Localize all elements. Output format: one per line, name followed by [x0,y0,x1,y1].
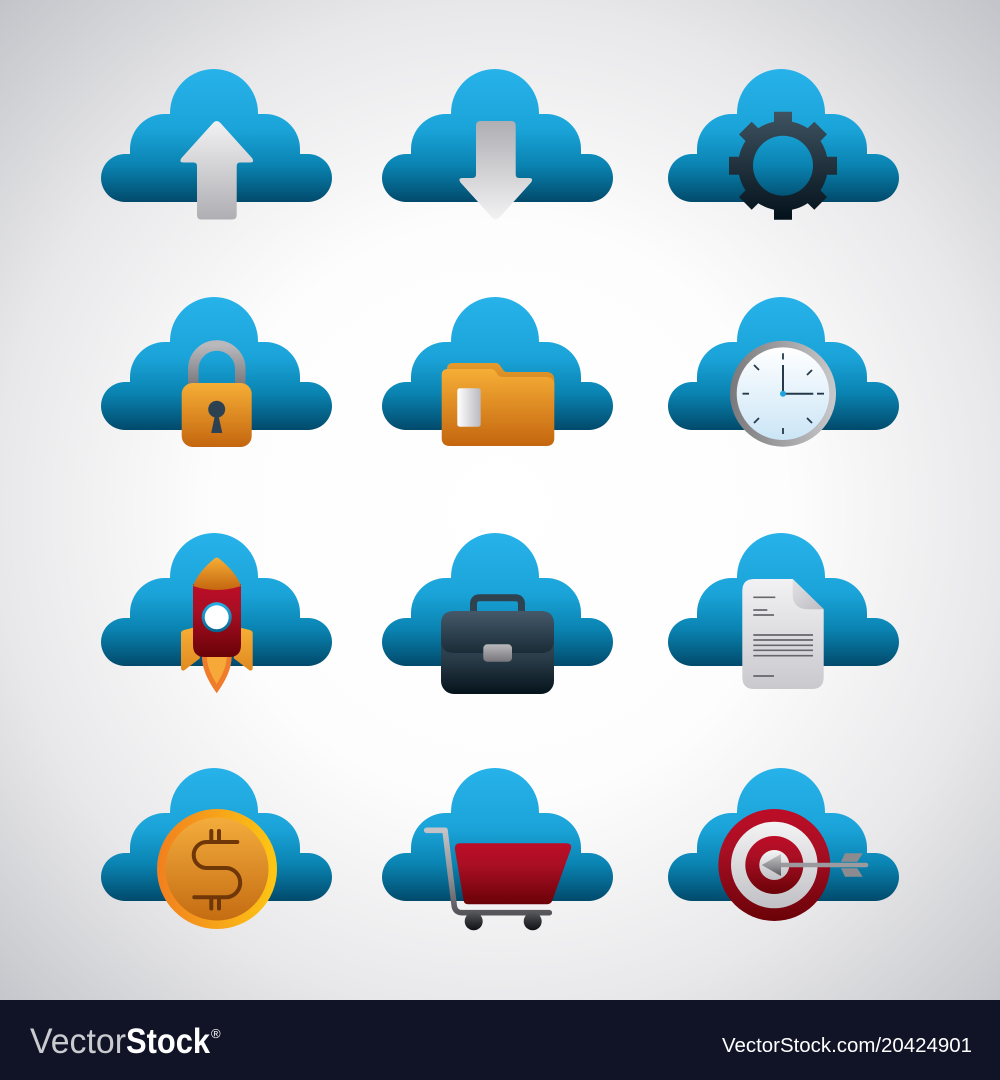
panel: cloud upload [101,69,332,220]
icon: clock [730,341,836,447]
panel: cloud coin [101,768,332,929]
icon: shopping cart [427,830,571,930]
cloud shape [101,69,332,202]
icon: up arrow [180,121,253,220]
panel: cloud download [382,69,613,220]
icon: briefcase [441,598,554,694]
panel: cloud shopping cart [382,768,613,930]
icon: target with arrow [718,809,866,921]
brand logo: ® [211,1026,221,1041]
cloud shape [101,297,332,430]
image id text: VectorStock.com/20424901 [722,1035,972,1057]
icon: padlock [182,346,252,447]
panel: cloud security [101,297,332,447]
panel: cloud rocket [101,533,332,693]
icon: down arrow [459,121,532,220]
cloud shape [101,533,332,666]
icon: folder [442,363,554,446]
cloud shape [668,69,899,202]
footer bar [0,1000,1000,1080]
cloud shape [101,768,332,901]
cloud shape [382,533,613,666]
brand logo: Vector [30,1022,126,1061]
panel: cloud document [668,533,899,689]
icon: gear [729,112,837,220]
panel: cloud briefcase [382,533,613,694]
cloud shape [668,533,899,666]
panel: cloud clock [668,297,899,447]
cloud shape [668,768,899,901]
icon: rocket [181,558,253,693]
brand logo [30,1022,221,1061]
cloud shape [382,69,613,202]
cloud shape [382,297,613,430]
icon: document [742,579,824,689]
panel: cloud target [668,768,899,921]
panel: cloud folder [382,297,613,446]
cloud shape [382,768,613,901]
panel: cloud settings [668,69,899,220]
cloud shape [668,297,899,430]
icon: dollar coin [157,809,277,929]
brand logo: Stock [126,1022,210,1061]
